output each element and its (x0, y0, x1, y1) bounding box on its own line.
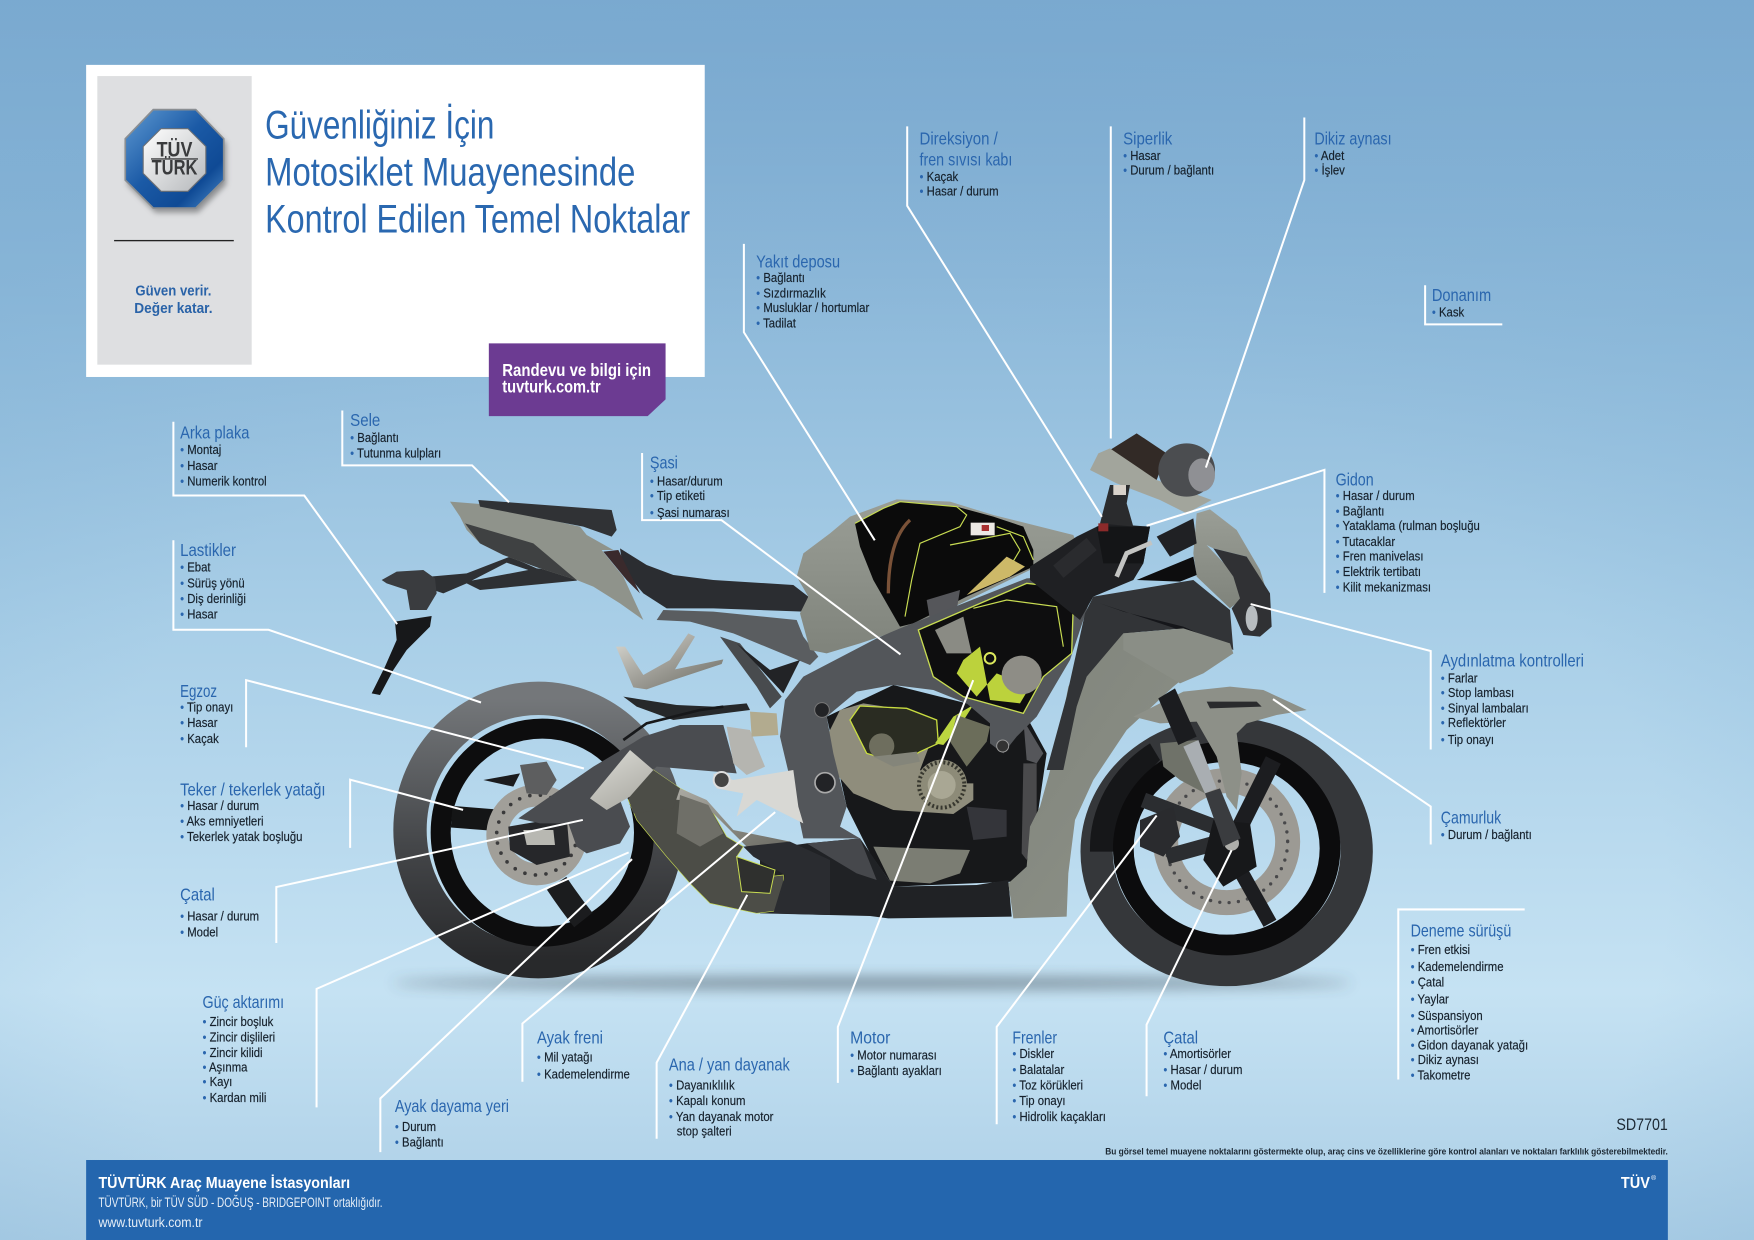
label: Yakıt deposu: • Sızdırmazlık (756, 286, 827, 301)
label: Donanım (1425, 285, 1502, 324)
label: Deneme sürüşü: • Kademelendirme (1411, 959, 1504, 974)
label: Ayak freni: Ayak freni (537, 1028, 603, 1048)
dashboard (1110, 433, 1167, 480)
label: Çatal (rear): Çatal (180, 884, 215, 904)
label: Arka plaka: • Hasar (180, 458, 218, 473)
label: Çamurluk: • Durum / bağlantı (1441, 827, 1532, 842)
label: Şasi: Şasi (650, 453, 678, 473)
headlight (1213, 548, 1272, 637)
handlebar (1058, 544, 1092, 572)
dark fairing panel (1047, 580, 1233, 770)
label: Teker / tekerlek yatağı: Teker / tekerlek yatağı (180, 779, 326, 799)
label: Direksiyon: • Hasar / durum (920, 184, 999, 199)
title (265, 104, 690, 242)
label: Ana / yan dayanak (657, 895, 790, 1139)
label: Şasi (642, 453, 900, 654)
nose (1193, 509, 1269, 608)
label: Ayak dayama yeri: • Durum (395, 1119, 436, 1134)
registered mark: ® (1651, 1174, 1656, 1182)
gray fairing side (1123, 628, 1233, 683)
label: Sele: Sele (350, 410, 380, 430)
label: Ana / yan dayanak: stop şalteri (677, 1124, 732, 1139)
label: Lastikler: • Sürüş yönü (180, 576, 245, 590)
logo: TÜRK (152, 155, 198, 180)
label: Ayak dayama yeri: Ayak dayama yeri (395, 1096, 509, 1116)
label: Çatal (front): • Hasar / durum (1163, 1062, 1242, 1077)
belly pan (760, 838, 1012, 918)
front wheel (1090, 733, 1357, 970)
label: Deneme sürüşü (1398, 909, 1528, 1083)
label: Yakıt deposu: • Tadilat (756, 316, 797, 331)
label: Çatal (rear): • Hasar / durum (180, 909, 259, 924)
label: Arka plaka (173, 422, 397, 624)
label: Ayak dayama yeri (380, 859, 632, 1152)
title: Motosiklet Muayenesinde (265, 151, 635, 195)
label: Frenler: • Balatalar (1012, 1062, 1064, 1077)
belly front (743, 842, 830, 915)
intake block (967, 807, 1007, 840)
fuel tank (797, 499, 1077, 653)
label: Ana / yan dayanak: Ana / yan dayanak (669, 1055, 790, 1075)
logo (125, 110, 226, 213)
label: Güç aktarımı: • Zincir dişlileri (202, 1030, 275, 1045)
engine cover (823, 703, 973, 814)
label: Çatal (front) (1147, 850, 1242, 1096)
logo panel (97, 76, 252, 365)
label: Gidon: • Hasar / durum (1336, 488, 1415, 503)
fender (1133, 687, 1307, 810)
label: Gidon: • Bağlantı (1336, 504, 1384, 519)
label: Ayak freni (522, 812, 775, 1082)
label: Direksiyon: fren sıvısı kabı (920, 150, 1012, 170)
label: Donanım: • Kask (1432, 305, 1465, 320)
label: Güç aktarımı: • Zincir kilidi (202, 1045, 263, 1060)
label: Gidon: • Fren manivelası (1336, 549, 1424, 564)
label: Motor: Motor (850, 1028, 890, 1048)
tail cowl (450, 502, 643, 620)
label: Siperlik: • Durum / bağlantı (1123, 163, 1214, 178)
label: Aydınlatma kontrolleri (1251, 604, 1584, 749)
label: Egzoz: • Hasar (180, 715, 218, 730)
label: Motor: • Motor numarası (850, 1048, 937, 1063)
label: Gidon: • Kilit mekanizması (1336, 580, 1431, 595)
label: Yakıt deposu (744, 244, 875, 540)
label: Deneme sürüşü: • Amortisörler (1411, 1023, 1478, 1038)
rear brake bracket (727, 727, 765, 775)
label: Egzoz: Egzoz (180, 681, 217, 701)
cockpit cavity (1137, 557, 1197, 582)
label: Lastikler (173, 540, 481, 702)
label: Şasi: • Şasi numarası (650, 505, 730, 520)
frame cutout (918, 583, 1073, 713)
label: Çatal (front): Çatal (1163, 1028, 1198, 1048)
title box (86, 65, 705, 377)
footer bar: TÜVTÜRK, bir TÜV SÜD - DOĞUŞ - BRIDGEPOINT ortaklığıdır. (98, 1195, 383, 1210)
subframe (657, 610, 818, 665)
label: Şasi: • Hasar/durum (650, 474, 723, 489)
frame (780, 577, 1090, 838)
label: Yakıt deposu: • Bağlantı (756, 270, 805, 285)
slogan: Güven verir. (135, 282, 211, 299)
label: Siperlik: Siperlik (1123, 128, 1172, 148)
label: Güç aktarımı: • Kardan mili (202, 1090, 266, 1105)
TÜV mark: TÜV (1621, 1173, 1650, 1192)
document code: SD7701 (1616, 1115, 1668, 1134)
label: Dikiz aynası (1206, 117, 1392, 468)
label: Yakıt deposu: • Musluklar / hortumlar (756, 300, 869, 315)
subframe strut (720, 637, 782, 708)
label: Deneme sürüşü: Deneme sürüşü (1411, 920, 1511, 940)
label: Ayak freni: • Kademelendirme (537, 1067, 630, 1082)
label: Yakıt deposu: Yakıt deposu (756, 251, 840, 271)
label: Deneme sürüşü: • Dikiz aynası (1411, 1052, 1479, 1067)
label: Siperlik (1111, 126, 1214, 438)
label: Teker / tekerlek yatağı: • Hasar / durum (180, 798, 259, 813)
label: Egzoz: • Kaçak (180, 731, 220, 746)
label: Sele: • Tutunma kulpları (350, 446, 441, 461)
slogan (134, 282, 213, 317)
exhaust pipes (1023, 720, 1043, 763)
engine bay (827, 685, 1047, 887)
label: Aydınlatma kontrolleri: • Farlar (1441, 671, 1478, 686)
label: Dikiz aynası: Dikiz aynası (1314, 128, 1392, 148)
clutch gear (916, 760, 967, 810)
label: Dikiz aynası: • Adet (1314, 148, 1345, 163)
swingarm (518, 725, 737, 853)
lime highlights (935, 705, 973, 745)
oil pan (873, 847, 970, 883)
logo: TÜV (157, 137, 193, 162)
label: Gidon: • Elektrik tertibatı (1336, 564, 1421, 579)
label: Lastikler: • Hasar (180, 607, 218, 622)
label: Sele (342, 410, 509, 502)
label: Frenler (997, 815, 1157, 1124)
label: Deneme sürüşü: • Yaylar (1411, 992, 1449, 1007)
stem (1100, 485, 1133, 527)
fork (1158, 688, 1197, 745)
label: Egzoz: • Tip onayı (180, 700, 233, 715)
label: Frenler: • Diskler (1012, 1047, 1054, 1061)
label: Aydınlatma kontrolleri: • Tip onayı (1441, 732, 1494, 747)
rear frame, seat and tail (450, 500, 818, 720)
label: Ayak dayama yeri: • Bağlantı (395, 1135, 444, 1150)
footer bar: TÜVTÜRK Araç Muayene İstasyonları (98, 1173, 350, 1192)
label: Şasi: • Tip etiketi (650, 488, 705, 503)
appointment badge: Randevu ve bilgi için (502, 360, 651, 380)
label: Direksiyon: • Kaçak (920, 170, 959, 184)
label: Güç aktarımı (202, 852, 629, 1107)
label: Motor (838, 680, 973, 1083)
label: Güç aktarımı: • Zincir boşluk (202, 1014, 274, 1029)
hugger (623, 697, 750, 720)
label: Motor: • Bağlantı ayakları (850, 1063, 942, 1078)
label: Direksiyon (907, 126, 1102, 517)
catalyst section (628, 770, 783, 913)
label: Aydınlatma kontrolleri: • Stop lambası (1441, 685, 1514, 700)
label: Çatal (front): • Amortisörler (1163, 1047, 1231, 1061)
slogan: Değer katar. (134, 300, 213, 317)
ground shadow (392, 978, 1352, 988)
label: Çatal (front): • Model (1163, 1078, 1201, 1093)
label: Lastikler: Lastikler (180, 540, 236, 560)
label: Deneme sürüşü: • Gidon dayanak yatağı (1411, 1038, 1528, 1052)
label: Dikiz aynası: • İşlev (1314, 163, 1346, 178)
label: Arka plaka: • Montaj (180, 442, 221, 457)
licence plate holder (372, 557, 580, 695)
label: Egzoz (180, 680, 584, 768)
label: Sele: • Bağlantı (350, 430, 399, 445)
footer bar: www.tuvturk.com.tr (98, 1214, 203, 1230)
label: Ana / yan dayanak: • Dayanıklılık (669, 1078, 736, 1093)
label: Arka plaka: • Numerik kontrol (180, 474, 267, 489)
label: Deneme sürüşü: • Çatal (1411, 975, 1444, 990)
label: Çamurluk: Çamurluk (1441, 807, 1501, 827)
front fender and fork (1133, 687, 1307, 847)
label: Donanım: Donanım (1432, 285, 1491, 305)
engine and main frame (760, 577, 1090, 918)
label: Frenler: • Toz körükleri (1012, 1078, 1083, 1093)
label: Güç aktarımı: • Kayı (202, 1074, 232, 1089)
disclaimer: Bu görsel temel muayene noktalarını göstermekte olup, araç cins ve özelliklerine göre kontrol alanları ve noktaları farklılık gösterebilmektedir. (1105, 1146, 1668, 1157)
label: Deneme sürüşü: • Süspansiyon (1411, 1008, 1483, 1023)
rear wheel (410, 698, 667, 962)
label: Teker / tekerlek yatağı (180, 779, 463, 848)
label: Arka plaka: Arka plaka (180, 422, 249, 442)
label: Gidon: Gidon (1336, 469, 1374, 489)
label: Aydınlatma kontrolleri: Aydınlatma kontrolleri (1441, 651, 1584, 671)
upper fairing and cockpit (918, 433, 1272, 770)
label: Gidon: • Tutacaklar (1336, 534, 1395, 549)
label: Ana / yan dayanak: • Kapalı konum (669, 1093, 745, 1108)
label: Deneme sürüşü: • Fren etkisi (1411, 942, 1470, 957)
label: Teker / tekerlek yatağı: • Tekerlek yatak boşluğu (180, 829, 303, 844)
foot peg bracket (713, 770, 803, 823)
label: Çamurluk (1273, 699, 1532, 845)
label: Gidon (1147, 469, 1480, 595)
appointment badge: tuvturk.com.tr (502, 377, 601, 397)
label: Çatal (rear): • Model (180, 925, 218, 939)
motorcycle illustration (372, 433, 1357, 970)
label: Frenler: Frenler (1012, 1028, 1057, 1048)
label: Frenler: • Tip onayı (1012, 1093, 1066, 1108)
label: Teker / tekerlek yatağı: • Aks emniyetleri (180, 814, 264, 829)
pillion peg (616, 633, 723, 689)
footer bar (86, 1160, 1668, 1240)
label: Frenler: • Hidrolik kaçakları (1012, 1109, 1106, 1124)
muffler (590, 750, 790, 850)
label: Direksiyon: Direksiyon / (920, 128, 998, 148)
label: Lastikler: • Ebat (180, 560, 211, 575)
swingarm and exhaust (518, 707, 830, 915)
fairing (1008, 632, 1210, 918)
title: Kontrol Edilen Temel Noktalar (265, 198, 690, 242)
steering head (1030, 523, 1150, 620)
windscreen bezel (1090, 448, 1212, 513)
label: Aydınlatma kontrolleri: • Sinyal lambaları (1441, 701, 1529, 716)
label: Çatal (rear) (180, 820, 583, 943)
label: Gidon: • Yataklama (rulman boşluğu (1336, 519, 1480, 533)
label: Aydınlatma kontrolleri: • Reflektörler (1441, 715, 1506, 730)
title: Güvenliğiniz İçin (265, 104, 494, 148)
label: Güç aktarımı: • Aşınma (202, 1060, 248, 1075)
label: Siperlik: • Hasar (1123, 148, 1161, 163)
mirror (1158, 443, 1215, 497)
label: Lastikler: • Diş derinliği (180, 591, 246, 606)
label: Güç aktarımı: Güç aktarımı (202, 992, 284, 1012)
appointment badge (489, 343, 666, 416)
label: Deneme sürüşü: • Takometre (1411, 1068, 1471, 1083)
seat (620, 548, 808, 612)
label: Ana / yan dayanak: • Yan dayanak motor (669, 1109, 773, 1124)
label: Ayak freni: • Mil yatağı (537, 1050, 593, 1065)
